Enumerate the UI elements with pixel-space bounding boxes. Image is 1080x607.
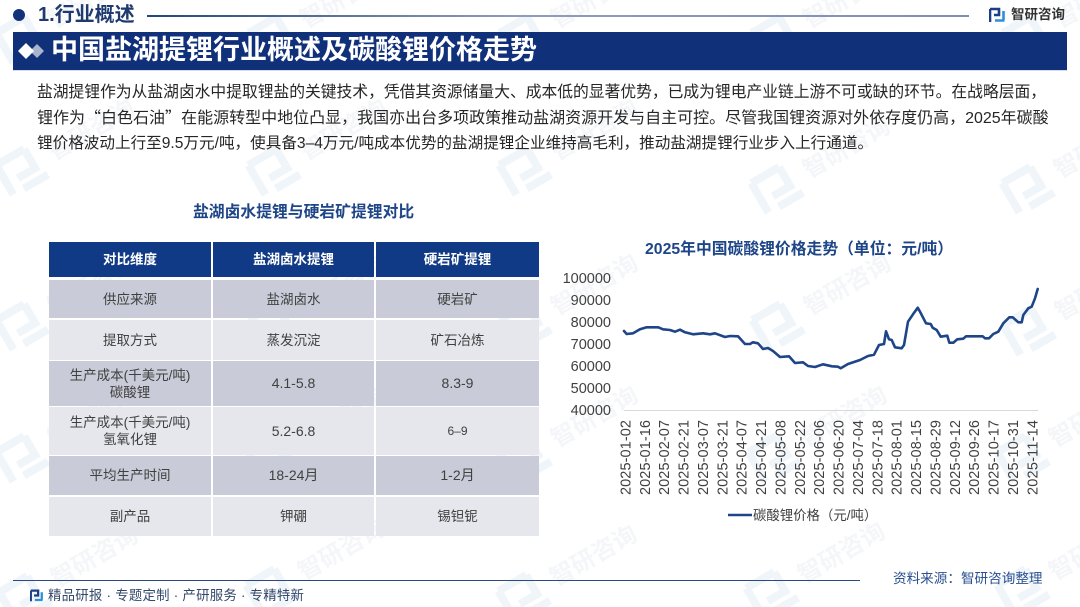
footer rule bbox=[13, 580, 860, 581]
icon: footer logo bbox=[30, 590, 43, 602]
x axis date labels: 2025-02-21 bbox=[677, 420, 693, 495]
row: 碳酸锂生产成本: 4.1-5.8 bbox=[272, 375, 315, 391]
x axis date labels: 2025-01-16 bbox=[638, 420, 654, 495]
x axis date labels: 2025-03-07 bbox=[696, 420, 712, 495]
x axis date labels bbox=[618, 420, 1041, 495]
price line bbox=[624, 289, 1038, 368]
background watermark layer: 智研咨询 bbox=[43, 250, 140, 321]
icon: brand mark bbox=[989, 8, 1005, 22]
background watermark layer: 智研咨询 bbox=[545, 521, 642, 592]
x axis date labels: 2025-08-29 bbox=[928, 420, 944, 495]
table header row bbox=[49, 242, 539, 277]
row: 副产品: 锡钽铌 bbox=[437, 509, 478, 524]
background watermark layer: 智研咨询 bbox=[295, 95, 392, 166]
row: 供应来源 bbox=[49, 280, 539, 318]
row: 氢氧化锂生产成本 bbox=[49, 407, 539, 455]
row: 碳酸锂生产成本: 8.3-9 bbox=[442, 375, 473, 391]
row: 副产品 bbox=[49, 497, 539, 536]
background watermark layer: 智研咨询 bbox=[43, 95, 140, 166]
table header row: 盐湖卤水提锂 bbox=[253, 252, 334, 267]
row: 提取方式: 提取方式 bbox=[103, 332, 157, 348]
y axis labels: 40000 bbox=[571, 403, 611, 419]
main title: 中国盐湖提锂行业概述及碳酸锂价格走势 bbox=[51, 35, 537, 65]
intro paragraph bbox=[37, 83, 1049, 152]
row: 平均生产时间: 1-2月 bbox=[440, 467, 475, 483]
title band bbox=[13, 32, 1067, 70]
table header row: 对比维度 bbox=[103, 252, 157, 267]
background watermark layer: 智研咨询 bbox=[546, 382, 643, 453]
x axis date labels: 2025-05-08 bbox=[774, 420, 790, 495]
row: 碳酸锂生产成本: 碳酸锂 bbox=[110, 384, 150, 400]
row: 氢氧化锂生产成本: 生产成本(千美元/吨) bbox=[70, 415, 190, 430]
row: 提取方式: 蒸发沉淀 bbox=[266, 332, 320, 348]
row: 平均生产时间 bbox=[49, 456, 539, 495]
x axis date labels: 2025-06-06 bbox=[812, 420, 828, 495]
y axis labels bbox=[563, 271, 611, 419]
row: 供应来源: 盐湖卤水 bbox=[266, 292, 320, 306]
row: 碳酸锂生产成本 bbox=[49, 361, 539, 406]
y axis labels: 80000 bbox=[571, 315, 611, 331]
row: 氢氧化锂生产成本: 6–9 bbox=[447, 424, 468, 438]
row: 供应来源: 供应来源 bbox=[103, 292, 157, 306]
chart title: 2025年中国碳酸锂价格走势（单位：元/吨） bbox=[645, 241, 953, 258]
x axis date labels: 2025-08-01 bbox=[890, 420, 906, 495]
footer services text: 精品研报 · 专题定制 · 产研服务 · 专精特新 bbox=[48, 588, 304, 603]
footer services strip bbox=[30, 588, 304, 603]
x axis date labels: 2025-02-07 bbox=[657, 420, 673, 495]
background watermark layer: 智研咨询 bbox=[799, 250, 896, 321]
section heading text: 1.行业概述 bbox=[38, 4, 135, 26]
x axis date labels: 2025-10-17 bbox=[986, 420, 1002, 495]
row: 氢氧化锂生产成本: 氢氧化锂 bbox=[103, 432, 157, 447]
y axis labels: 70000 bbox=[571, 337, 611, 353]
x axis date labels: 2025-09-26 bbox=[967, 420, 983, 495]
background watermark layer: 智研咨询 bbox=[793, 518, 890, 589]
background watermark layer: 智研咨询 bbox=[546, 250, 643, 321]
brand name: 智研咨询 bbox=[1011, 7, 1065, 22]
intro paragraph: 锂作为“白色石油”在能源转型中地位凸显，我国亦出台多项政策推动盐湖资源开发与自主可控。尽管我国锂资源对外依存度仍高，2025年碳酸 bbox=[37, 104, 1049, 128]
row: 平均生产时间: 18-24月 bbox=[269, 467, 318, 483]
y axis labels: 100000 bbox=[563, 271, 611, 287]
brand logo bbox=[989, 7, 1065, 22]
background watermark layer: 智研咨询 bbox=[43, 382, 140, 453]
row: 碳酸锂生产成本: 生产成本(千美元/吨) bbox=[70, 368, 190, 382]
x axis date labels: 2025-11-14 bbox=[1025, 420, 1041, 495]
row: 副产品: 钾硼 bbox=[280, 509, 307, 524]
background watermark layer: 智研咨询 bbox=[795, 382, 892, 453]
y axis labels: 90000 bbox=[571, 293, 611, 309]
x axis date labels: 2025-06-20 bbox=[832, 420, 848, 495]
x axis date labels: 2025-07-18 bbox=[870, 420, 886, 495]
header rule bbox=[147, 15, 969, 16]
line chart: lithium carbonate price bbox=[563, 271, 1041, 523]
row: 提取方式 bbox=[49, 320, 539, 360]
background watermark layer: 智研咨询 bbox=[295, 382, 392, 453]
x axis date labels: 2025-05-22 bbox=[793, 420, 809, 495]
table header row: 硬岩矿提锂 bbox=[424, 252, 491, 267]
chart legend: 碳酸锂价格（元/吨） bbox=[753, 508, 877, 523]
row: 平均生产时间: 平均生产时间 bbox=[90, 468, 170, 483]
row: 副产品: 副产品 bbox=[110, 509, 150, 524]
background watermark layer: 智研咨询 bbox=[295, 250, 392, 321]
row: 氢氧化锂生产成本: 5.2-6.8 bbox=[272, 422, 315, 438]
x axis date labels: 2025-09-12 bbox=[948, 420, 964, 495]
icon: section bullet bbox=[13, 9, 25, 21]
x axis date labels: 2025-01-02 bbox=[618, 420, 634, 495]
table heading: 盐湖卤水提锂与硬岩矿提锂对比 bbox=[193, 204, 414, 221]
x axis date labels: 2025-10-31 bbox=[1006, 420, 1022, 495]
x axis date labels: 2025-04-21 bbox=[754, 420, 770, 495]
intro paragraph: 锂价格波动上行至9.5万元/吨，使具备3–4万元/吨成本优势的盐湖提锂企业维持高毛利，推动盐湖提锂行业步入上行通道。 bbox=[37, 134, 873, 152]
icon: diamonds bbox=[18, 43, 44, 59]
x axis date labels: 2025-04-07 bbox=[735, 420, 751, 495]
y axis labels: 50000 bbox=[571, 381, 611, 397]
comparison table bbox=[49, 242, 539, 536]
section heading: 1.行业概述 bbox=[13, 4, 135, 26]
background watermark layer: 智研咨询 bbox=[46, 522, 143, 593]
y axis labels: 60000 bbox=[571, 359, 611, 375]
x axis date labels: 2025-03-21 bbox=[715, 420, 731, 495]
intro paragraph: 盐湖提锂作为从盐湖卤水中提取锂盐的关键技术，凭借其资源储量大、成本低的显著优势，已成为锂电产业链上游不可或缺的环节。在战略层面， bbox=[37, 84, 1046, 100]
x axis date labels: 2025-08-15 bbox=[909, 420, 925, 495]
row: 提取方式: 矿石冶炼 bbox=[430, 332, 484, 348]
source note: 资料来源：智研咨询整理 bbox=[893, 571, 1043, 586]
x axis date labels: 2025-07-04 bbox=[851, 420, 867, 495]
row: 供应来源: 硬岩矿 bbox=[437, 292, 478, 306]
background watermark layer: 智研咨询 bbox=[798, 113, 895, 184]
background watermark layer: 智研咨询 bbox=[293, 515, 390, 586]
background watermark layer: 智研咨询 bbox=[546, 95, 643, 166]
